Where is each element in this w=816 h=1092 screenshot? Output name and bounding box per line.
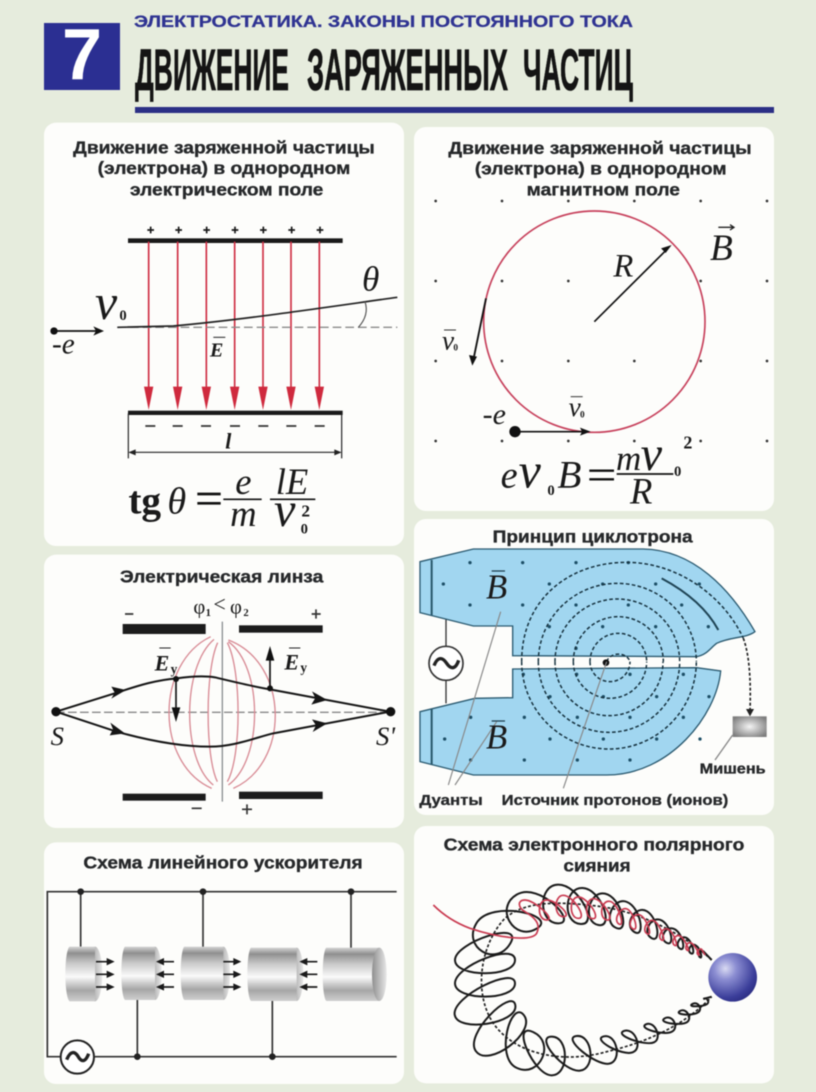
- ion source callout: [502, 662, 728, 809]
- field vector Ey left: [154, 648, 180, 722]
- formula tg theta: θ: [167, 480, 186, 522]
- panel: charged particle in magnetic field: [414, 127, 774, 511]
- field labels B: [486, 568, 507, 756]
- heading: magnetic field: Движение заряженной частицы: [448, 138, 752, 158]
- panel: linear accelerator: [44, 842, 404, 1084]
- heading: magnetic field: (электрона) в однородном: [475, 158, 726, 178]
- formula tg theta: 0: [301, 521, 308, 537]
- circuit wiring: [47, 888, 397, 1060]
- formula e v0 B: v: [519, 443, 542, 499]
- velocity label: v: [95, 274, 118, 330]
- beam arrowheads: [110, 687, 327, 735]
- circular orbit: [484, 211, 705, 432]
- upper dee: [420, 549, 755, 657]
- angle theta: θ: [362, 260, 379, 299]
- AC source wires: [444, 618, 448, 703]
- velocity vector left: [442, 298, 486, 366]
- source and image points: S': [376, 721, 396, 751]
- electron with velocity: 0: [580, 410, 585, 420]
- field vector Ey left: у: [171, 661, 178, 676]
- formula tg theta: 2: [301, 502, 310, 521]
- formula e v0 B: B: [557, 453, 581, 497]
- target: [700, 716, 767, 777]
- formula e v0 B: 0: [674, 464, 681, 480]
- heading: aurora: [444, 835, 744, 876]
- header badge: number 7: [44, 15, 120, 95]
- potential relation: 1: [206, 608, 211, 619]
- panel: charged particle in electric field: [44, 123, 404, 546]
- formula e v0 B: R: [629, 470, 652, 511]
- length dimension l: [128, 413, 342, 458]
- heading: magnetic field: [448, 138, 752, 199]
- electrode plates: [123, 624, 323, 801]
- potential relation: [193, 591, 249, 619]
- field labels B: B: [486, 568, 507, 606]
- length dimension l: l: [225, 428, 232, 453]
- dees callout: [419, 612, 501, 809]
- extraction path to target: [743, 638, 754, 716]
- drift tube 1: [65, 947, 102, 1001]
- angle theta: [358, 260, 379, 327]
- dashed axis: [117, 325, 397, 329]
- field vector Ey right: [266, 646, 307, 691]
- formula e v0 B: [501, 428, 692, 511]
- particle trajectory: [117, 297, 397, 327]
- dee end bands: [429, 560, 435, 764]
- field label E: E: [209, 340, 223, 362]
- radius arrow R: R: [612, 249, 633, 285]
- axis lines: [56, 622, 390, 802]
- main title: [135, 38, 633, 103]
- formula e v0 B: m: [616, 439, 641, 478]
- heading: electric lens: Электрическая линза: [120, 567, 324, 587]
- magnetic field dots: [442, 561, 711, 762]
- black electron spiral: [455, 885, 712, 1075]
- main title: ЗАРЯЖЕННЫХ: [307, 38, 508, 103]
- gap field arrows: [96, 958, 317, 991]
- drift tube 3: [181, 947, 230, 1000]
- velocity vector left: 0: [453, 344, 458, 354]
- velocity label: 0: [119, 308, 127, 324]
- heading: electric field: электрическом поле: [130, 179, 323, 199]
- panel: polar aurora electron scheme: [414, 826, 774, 1083]
- formula tg theta: tg: [128, 478, 161, 522]
- ion source: [603, 659, 609, 666]
- deflector plate: [662, 578, 718, 630]
- heading: electric field: [73, 137, 375, 199]
- potential relation: 2: [243, 608, 249, 619]
- potential relation: φ: [193, 596, 205, 618]
- magnetic field dots: [434, 200, 768, 442]
- title rule: [135, 107, 774, 113]
- heading: aurora: Схема электронного полярного: [444, 835, 744, 855]
- field arrows: [144, 242, 324, 410]
- heading: magnetic field: магнитном поле: [527, 179, 680, 199]
- formula tg theta: m: [230, 493, 257, 534]
- formula tg theta: e: [235, 461, 251, 502]
- radius arrow R: [594, 245, 672, 322]
- formula e v0 B: v: [641, 428, 663, 481]
- field vector Ey right: у: [300, 660, 307, 675]
- plate polarity signs: [125, 609, 321, 814]
- dees callout: Дуанты: [419, 793, 483, 809]
- AC generator: [429, 646, 463, 680]
- main title: ДВИЖЕНИЕ: [135, 38, 289, 103]
- formula tg theta: lE: [276, 461, 308, 502]
- equipotential field lines: [169, 637, 275, 788]
- electron with velocity: -e: [483, 398, 506, 431]
- field vector Ey left: E: [154, 651, 169, 676]
- heading: cyclotron: Принцип циклотрона: [493, 526, 694, 546]
- red electron spiral: [433, 895, 705, 955]
- spiral proton path: [522, 562, 743, 749]
- potential relation: <: [213, 591, 226, 616]
- heading: linear accelerator: Схема линейного ускорителя: [83, 852, 363, 872]
- electron with velocity: v: [569, 392, 582, 422]
- panel: electric lens: [44, 555, 404, 828]
- formula e v0 B: 2: [683, 433, 692, 453]
- electron with arrow: -e: [52, 328, 75, 360]
- panel: cyclotron principle: [414, 519, 774, 815]
- dashed magnetic field line: [481, 903, 712, 1057]
- electron beam paths: [56, 676, 390, 747]
- formula tg theta: v: [274, 484, 296, 537]
- formula e v0 B: e: [501, 455, 518, 497]
- heading: electric field: (электрона) в однородном: [98, 158, 350, 178]
- electron with velocity: [483, 392, 591, 437]
- field label B: B: [710, 228, 733, 269]
- drift tube 5: [323, 948, 387, 1001]
- section subtitle: ЭЛЕКТРОСТАТИКА. ЗАКОНЫ ПОСТОЯННОГО ТОКА: [134, 12, 633, 31]
- source and image points: S: [51, 721, 64, 751]
- target: Мишень: [700, 761, 766, 777]
- heading: aurora: сияния: [563, 856, 631, 876]
- drift tube 4: [247, 948, 303, 1001]
- formula tg theta: [128, 461, 315, 537]
- electron with arrow: [50, 326, 104, 360]
- text: ЧАСТИЦ: [523, 38, 633, 103]
- AC generator: [61, 1040, 94, 1074]
- header badge: number 7: 7: [62, 15, 102, 95]
- planet sphere: [708, 953, 757, 1002]
- heading: electric field: Движение заряженной частицы: [73, 137, 375, 157]
- lower dee: [420, 668, 721, 775]
- formula e v0 B: 0: [547, 483, 555, 499]
- velocity vector left: v: [442, 325, 455, 355]
- bottom plate with minus charges: [128, 411, 343, 426]
- ion source callout: Источник протонов (ионов): [502, 793, 728, 809]
- drift tube 2: [121, 947, 162, 1000]
- potential relation: φ: [230, 596, 242, 618]
- top plate with plus charges: [128, 227, 343, 243]
- source and image points: [51, 707, 396, 751]
- field vector Ey right: E: [283, 649, 299, 674]
- field labels B: B: [486, 718, 507, 756]
